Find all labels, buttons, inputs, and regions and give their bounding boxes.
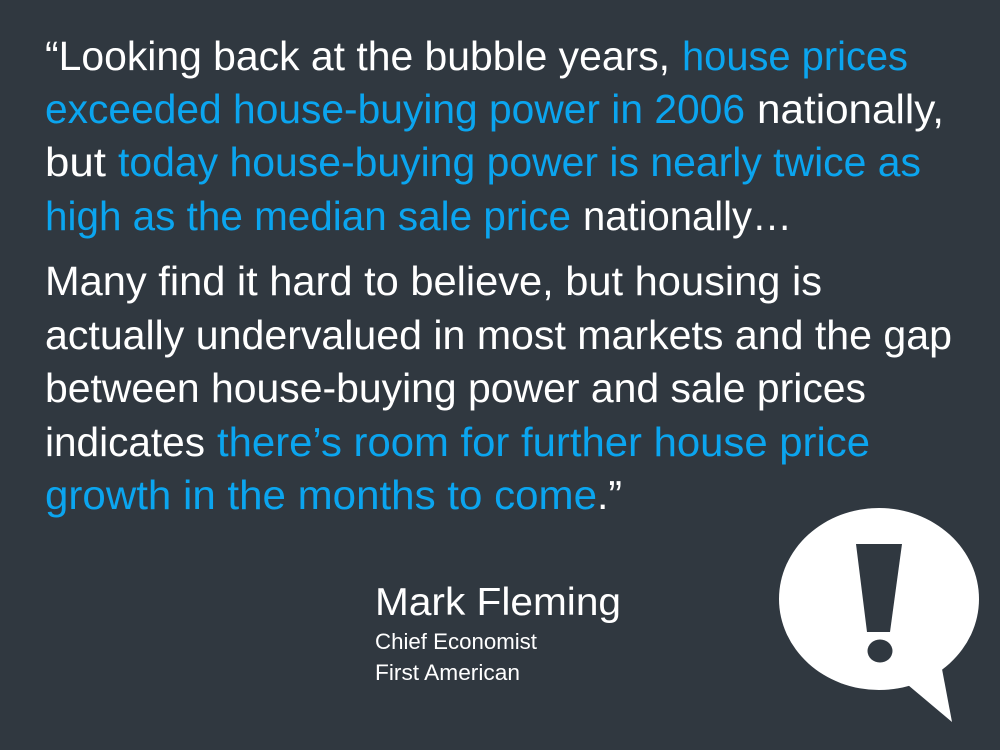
speaker company: First American (375, 660, 520, 685)
quote paragraph 1: nationally… (583, 193, 792, 239)
quote paragraph 2: indicates (45, 419, 205, 465)
quote paragraph 2 (45, 258, 952, 518)
speaker title: Chief Economist (375, 629, 537, 654)
quote paragraph 1: high as the median sale price (45, 193, 571, 239)
quote paragraph 2: Many find it hard to believe, but housing is (45, 258, 822, 304)
quote paragraph 2: between house-buying power and sale prices (45, 365, 866, 411)
quote paragraph 2: actually undervalued in most markets and the gap (45, 312, 952, 358)
quote paragraph 1: exceeded house-buying power in 2006 (45, 86, 745, 132)
quote paragraph 1: “Looking back at the bubble years, (45, 33, 670, 79)
quote paragraph 1 (45, 33, 944, 239)
speaker name: Mark Fleming (375, 581, 621, 624)
attribution (375, 581, 621, 685)
quote paragraph 1: nationally, (757, 86, 944, 132)
quote paragraph 1: house prices (682, 33, 908, 79)
quote paragraph 2: there’s room for further house price (217, 419, 870, 465)
quote paragraph 1: today house-buying power is nearly twice as (118, 139, 921, 185)
icon: speech bubble with exclamation mark (779, 508, 979, 722)
quote paragraph 1: but (45, 139, 106, 185)
quote paragraph 2: .” (597, 472, 622, 518)
quote paragraph 2: growth in the months to come (45, 472, 597, 518)
